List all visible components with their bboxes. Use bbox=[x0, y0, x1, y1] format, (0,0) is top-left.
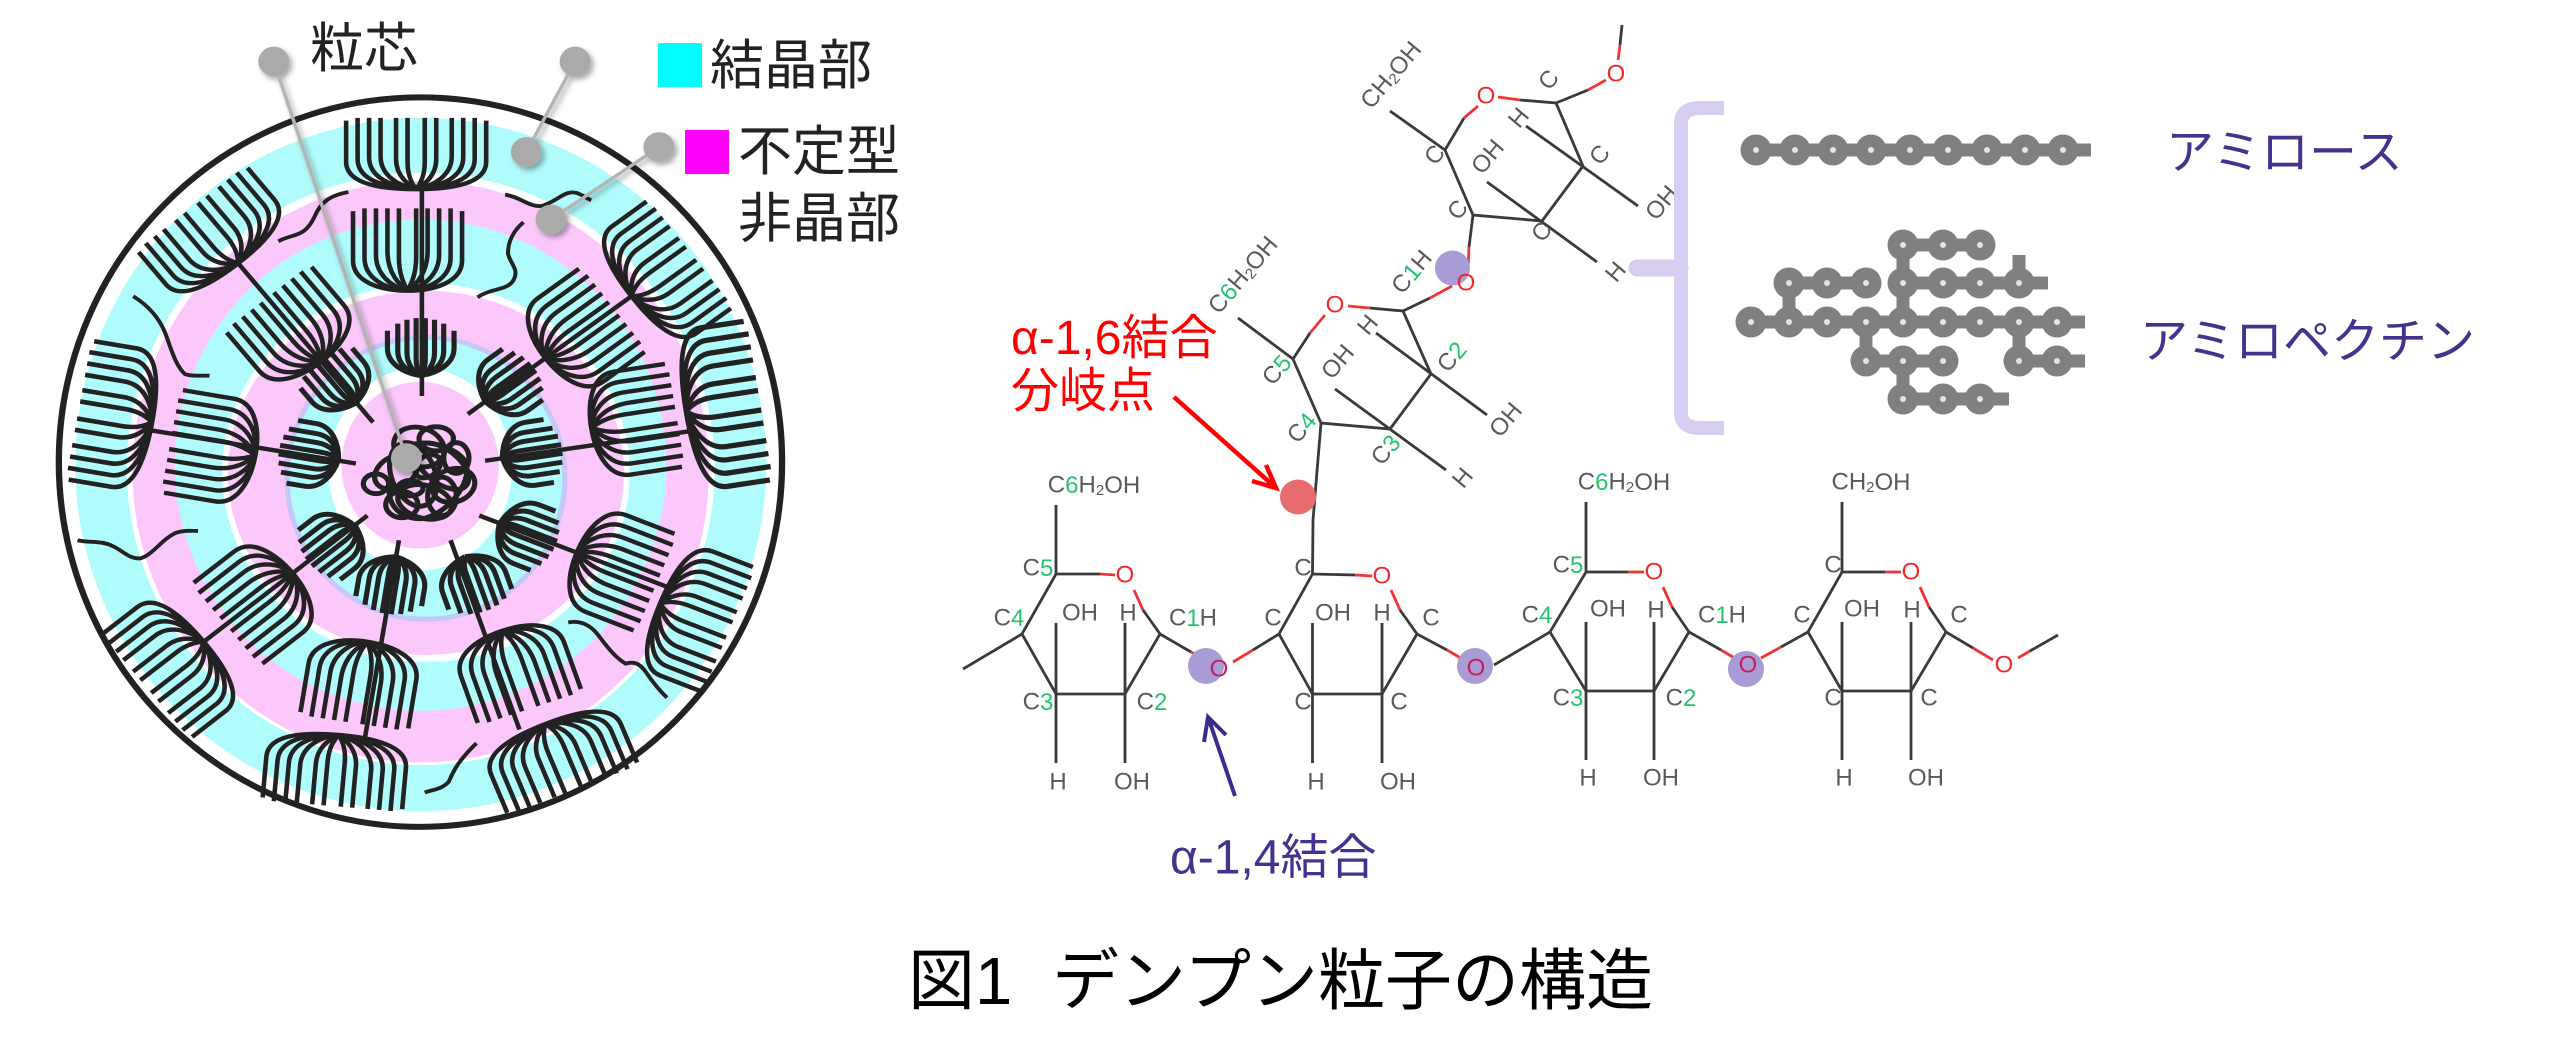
ring 3: 2 bbox=[1626, 478, 1634, 496]
ring 1: H bbox=[1119, 600, 1137, 626]
panel: branch glucose unit (lower) bbox=[1203, 231, 1528, 574]
ring 3 bbox=[1494, 468, 1746, 792]
ring 1: C5 bbox=[1023, 554, 1053, 582]
label: hilum: 粒芯 bbox=[310, 19, 418, 79]
panel: branch glucose unit (lower): C3 bbox=[1366, 430, 1406, 470]
ring 1: OH bbox=[1062, 600, 1098, 626]
ring 3: O bbox=[1645, 558, 1663, 586]
ring 4: OH bbox=[1875, 468, 1911, 496]
panel: branch glucose unit (upper): O bbox=[1477, 82, 1495, 110]
ring 4: C bbox=[1920, 684, 1938, 712]
panel: branch glucose unit (upper): H bbox=[1600, 257, 1632, 287]
label: amylopectin: アミロペクチン bbox=[2140, 316, 2475, 368]
ring 1: 2 bbox=[1096, 482, 1104, 498]
panel: branch glucose unit (lower): O bbox=[1326, 292, 1344, 318]
ring 2: C bbox=[1390, 688, 1408, 716]
ring 4: C bbox=[1824, 684, 1842, 712]
ring 2: C bbox=[1422, 604, 1440, 632]
panel: branch glucose unit (upper): C bbox=[1419, 140, 1451, 170]
ring 2: OH bbox=[1380, 768, 1416, 796]
ring 1: C4 bbox=[994, 604, 1024, 632]
panel: branch glucose unit (upper): C bbox=[1584, 140, 1616, 170]
ring 1: C6H bbox=[1048, 472, 1096, 498]
panel: branch glucose unit (lower): C6H bbox=[1203, 265, 1255, 319]
ring 3: C3 bbox=[1553, 684, 1583, 712]
ring 2: O bbox=[1373, 562, 1391, 590]
label: alpha-1,6 bond branch point: α-1,6結合 bbox=[1011, 312, 1217, 364]
panel: branch glucose unit (lower): H bbox=[1447, 463, 1479, 493]
ring 2: C bbox=[1294, 688, 1312, 716]
panel: branch glucose unit (lower): C5 bbox=[1257, 350, 1297, 390]
legend swatch: crystalline bbox=[658, 43, 702, 87]
ring 3: H bbox=[1647, 596, 1665, 624]
legend label: non-crystalline: 非晶部 bbox=[738, 189, 900, 249]
legend swatch: amorphous bbox=[685, 130, 729, 174]
ring 4: C bbox=[1950, 602, 1968, 628]
ring 3: C5 bbox=[1553, 552, 1583, 578]
ring 3: OH bbox=[1634, 468, 1670, 496]
ring 1: C1H bbox=[1169, 604, 1217, 632]
middle amylopectin clusters bbox=[161, 208, 685, 731]
inner amylopectin clusters bbox=[274, 318, 568, 622]
ring 4 bbox=[1761, 468, 2058, 792]
panel: branch glucose unit (upper): C bbox=[1526, 217, 1558, 247]
ring 2: C bbox=[1264, 604, 1282, 632]
panel: starch granule cross-section bbox=[59, 47, 782, 827]
alpha-1,4 link markers: O bbox=[1739, 652, 1757, 678]
bracket bbox=[1637, 108, 1724, 428]
amylose squiggles bbox=[77, 192, 667, 793]
arrow: to branch point bbox=[1174, 397, 1276, 488]
panel: branch glucose unit (upper): O bbox=[1607, 60, 1625, 88]
ring 3: OH bbox=[1643, 764, 1679, 792]
legend label: amorphous: 不定型 bbox=[738, 122, 900, 182]
panel: branch glucose unit (upper): C bbox=[1533, 65, 1565, 95]
ring 1: O bbox=[1116, 562, 1134, 588]
ring 3: C2 bbox=[1666, 684, 1696, 712]
marker: alpha-1,6 branch point bbox=[1280, 480, 1316, 514]
alpha-1,4 link markers: O bbox=[1210, 656, 1228, 682]
panel: branch glucose unit (upper): OH bbox=[1383, 36, 1427, 81]
ring 3: C4 bbox=[1522, 602, 1552, 628]
panel: branch glucose unit (lower): 2 bbox=[1242, 265, 1260, 282]
leader pin: crystalline bbox=[511, 47, 591, 167]
label: amylose: アミロース bbox=[2166, 126, 2403, 180]
panel: branch glucose unit (upper): CH bbox=[1355, 70, 1398, 114]
panel: main chain glucose units bbox=[963, 468, 2058, 796]
granule outline bbox=[59, 97, 782, 827]
legend label: crystalline: 結晶部 bbox=[710, 36, 872, 96]
ring 4: CH bbox=[1831, 468, 1866, 496]
panel: branch glucose unit (lower): C4 bbox=[1282, 408, 1322, 448]
concentric growth rings bbox=[75, 118, 766, 811]
leader pin: amorphous bbox=[536, 132, 674, 234]
panel: branch glucose unit (upper): OH bbox=[1640, 181, 1684, 225]
panel: branch glucose unit (lower): H bbox=[1352, 310, 1384, 340]
ring 4: C bbox=[1793, 602, 1811, 628]
panel: branch glucose unit (upper): O bbox=[1457, 270, 1475, 296]
panel: branch glucose unit (upper): OH bbox=[1466, 135, 1510, 179]
ring 4: C bbox=[1824, 552, 1842, 578]
ring 4: OH bbox=[1908, 764, 1944, 792]
panel: branch glucose unit (lower): OH bbox=[1484, 398, 1528, 442]
ring 4: H bbox=[1835, 764, 1853, 792]
ring 1: OH bbox=[1114, 768, 1150, 796]
alpha-1,4 link markers: O bbox=[1467, 654, 1485, 682]
alpha-1,4 link markers bbox=[1188, 648, 1764, 687]
arrow: to alpha-1,4 bond bbox=[1204, 717, 1235, 796]
panel: branch glucose unit (lower): OH bbox=[1239, 231, 1283, 276]
ring 2: H bbox=[1373, 600, 1391, 626]
ring 3: C6H bbox=[1578, 468, 1626, 496]
hilum tangle bbox=[363, 421, 480, 525]
ring 2 bbox=[1233, 554, 1464, 796]
ring 4: O bbox=[1995, 652, 2013, 678]
ring 1: C2 bbox=[1137, 688, 1167, 716]
label: alpha-1,4 bond: α-1,4結合 bbox=[1170, 832, 1376, 884]
title caption: デンプン粒子の構造 bbox=[1052, 944, 1653, 1018]
ring 4: OH bbox=[1844, 596, 1880, 622]
ring 1: C3 bbox=[1023, 688, 1053, 716]
title caption: 図1 bbox=[908, 944, 1012, 1018]
panel: branch glucose unit (lower): OH bbox=[1316, 340, 1360, 384]
outer amylopectin clusters bbox=[66, 118, 773, 815]
ring 4: H bbox=[1903, 596, 1921, 624]
diagram: amylopectin branched chain bbox=[1736, 230, 2085, 414]
panel: branch glucose unit (upper) bbox=[1355, 25, 1684, 296]
ring 1 bbox=[963, 472, 1217, 796]
ring 3: OH bbox=[1590, 596, 1626, 622]
ring 3: C1H bbox=[1698, 602, 1746, 628]
panel: branch glucose unit (lower): C1H bbox=[1386, 245, 1438, 299]
ring 4: 2 bbox=[1866, 478, 1875, 496]
panel: branch glucose unit (lower): C2 bbox=[1432, 337, 1472, 377]
ring 2: C bbox=[1294, 554, 1312, 582]
ring 1: OH bbox=[1104, 472, 1140, 498]
ring 3: H bbox=[1579, 764, 1597, 792]
panel: branch glucose unit (upper): C bbox=[1442, 195, 1474, 225]
radial stems bbox=[152, 189, 695, 740]
panel: branch glucose unit (upper): H bbox=[1503, 103, 1535, 133]
panel: branch glucose unit (upper): 2 bbox=[1385, 70, 1404, 87]
leader pin: hilum bbox=[258, 47, 422, 473]
ring 4: O bbox=[1902, 558, 1920, 586]
ring 2: H bbox=[1307, 768, 1325, 796]
diagram: amylose chain bbox=[1740, 134, 2091, 166]
ring 2: OH bbox=[1315, 600, 1351, 626]
label: alpha-1,6 bond branch point: 分岐点 bbox=[1011, 364, 1155, 418]
ring 1: H bbox=[1049, 768, 1067, 796]
